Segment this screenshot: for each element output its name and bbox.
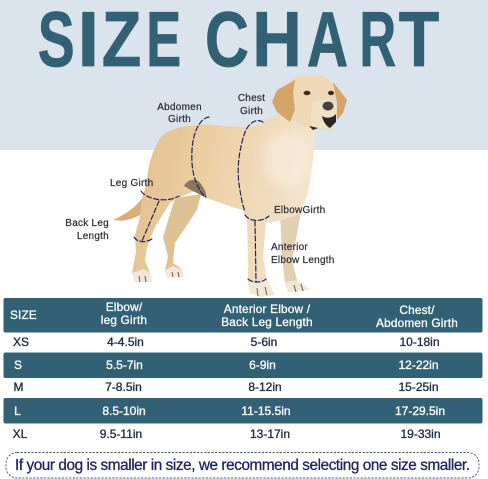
row M: 8-12in	[248, 380, 282, 394]
table header row: Back Leg Length	[221, 315, 313, 329]
row L	[4, 398, 482, 424]
label: abdomen girth	[157, 102, 202, 125]
row S: 5.5-7in	[106, 358, 143, 372]
note box: If your dog is smaller in size, we recommend selecting one size smaller.	[15, 457, 470, 474]
dashed line: anterior elbow length	[255, 221, 256, 281]
row S: 12-22in	[398, 358, 439, 372]
row XS: XS	[13, 335, 29, 349]
dog: ear right	[333, 82, 347, 120]
row XL	[13, 427, 441, 441]
row L: 8.5-10in	[102, 404, 146, 418]
title	[38, 0, 439, 84]
dog: body and near legs	[132, 105, 315, 297]
dog: tail	[113, 197, 143, 221]
dog: chest highlight	[264, 132, 310, 191]
dog: muzzle	[311, 100, 336, 129]
dashed line: leg girth	[141, 191, 179, 200]
table header row: SIZE	[10, 308, 37, 322]
row M: M	[14, 380, 24, 394]
dashed line: elbow girth	[245, 215, 269, 220]
table header row: Elbow/	[106, 300, 143, 314]
dashed line: abdomen girth	[192, 117, 209, 197]
label: chest girth	[238, 93, 265, 117]
dog: mouth	[309, 114, 336, 130]
row M	[14, 380, 439, 394]
label: back leg length: Length	[77, 231, 109, 242]
dog: far back leg	[163, 194, 201, 277]
table header row: Anterior Elbow /	[224, 302, 311, 316]
dashed line: paw girth	[248, 279, 266, 282]
row L: 11-15.5in	[241, 404, 291, 418]
dog: far front leg	[280, 212, 310, 292]
dog: ear left	[272, 80, 295, 122]
dashed line: back leg length	[142, 201, 159, 241]
row XL: 9.5-11in	[100, 427, 142, 441]
dog: paws	[132, 266, 310, 297]
note box	[6, 452, 479, 478]
row XL: 19-33in	[400, 427, 441, 441]
label: anterior elbow length	[271, 242, 335, 266]
row XL: XL	[13, 427, 28, 441]
dog illustration	[113, 76, 347, 297]
table	[4, 298, 482, 441]
row L: L	[14, 404, 21, 418]
label: leg girth: Leg Girth	[110, 178, 153, 189]
dog: toe lines	[139, 272, 303, 296]
table header row: Abdomen Girth	[376, 316, 458, 330]
label: back leg length: Back Leg	[65, 218, 109, 229]
label: abdomen girth: Abdomen	[157, 102, 202, 113]
label: abdomen girth: Girth	[168, 114, 191, 125]
label: anterior elbow length: Elbow Length	[271, 255, 335, 266]
row XL: 13-17in	[250, 427, 290, 441]
row S: S	[14, 358, 22, 372]
dog: belly shadow	[184, 180, 206, 198]
row XS	[13, 335, 440, 349]
row XS: 5-6in	[251, 335, 277, 349]
table header row: Chest/	[399, 303, 435, 317]
row XS: 10-18in	[399, 335, 440, 349]
label: chest girth: Chest	[238, 93, 265, 104]
dog: nose	[322, 102, 334, 110]
row M: 7-8.5in	[105, 380, 142, 394]
dog: head	[290, 76, 340, 130]
label: anterior elbow length: Anterior	[271, 242, 308, 253]
dashed line: back leg bottom	[134, 237, 153, 242]
row XS: 4-4.5in	[107, 335, 144, 349]
row S	[4, 352, 482, 378]
table header row: leg Girth	[101, 313, 147, 327]
header background	[0, 0, 488, 150]
row L: 17-29.5in	[395, 404, 445, 418]
dashed line: chest girth	[238, 121, 263, 212]
label: chest girth: Girth	[240, 106, 263, 117]
dog: eyes	[304, 91, 334, 95]
row M: 15-25in	[398, 380, 439, 394]
table header row	[4, 298, 482, 332]
label: elbow girth: ElbowGirth	[274, 205, 325, 216]
row S: 6-9in	[249, 358, 276, 372]
label: back leg length	[65, 218, 109, 242]
